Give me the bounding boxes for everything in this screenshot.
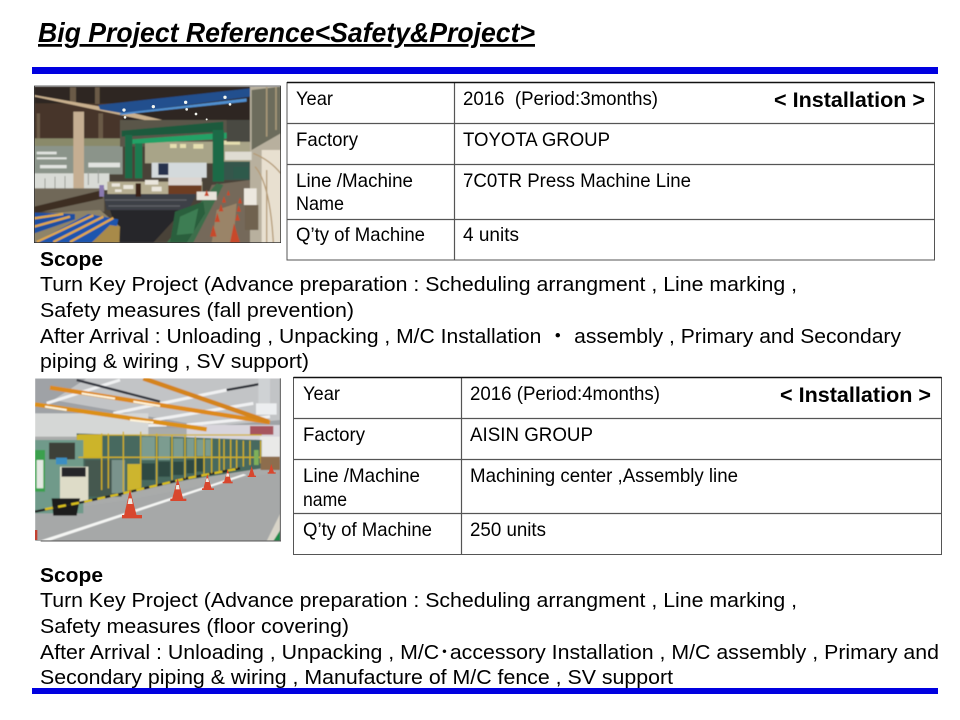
table: aisin project details: Year xyxy=(303,383,340,405)
table: toyota project details: 2016 (Period:3months) xyxy=(463,88,658,110)
table: aisin project details: name xyxy=(303,489,347,511)
scope text: aisin project: Turn Key Project (Advance preparation : Scheduling arrangment , Line marking , xyxy=(40,589,797,612)
scope text: aisin project: Safety measures (floor covering) xyxy=(40,615,349,638)
scope text: toyota project: piping & wiring , SV support) xyxy=(40,350,309,373)
table: toyota project details: Factory xyxy=(296,129,358,151)
table: toyota project details: Line /Machine xyxy=(296,170,413,192)
scope text: toyota project: Turn Key Project (Advance preparation : Scheduling arrangment , Line marking , xyxy=(40,273,797,296)
table: toyota project details: Year xyxy=(296,88,333,110)
table: aisin project details: 250 units xyxy=(470,519,546,541)
table: toyota project details: 7C0TR Press Machine Line xyxy=(463,170,691,192)
traffic cones xyxy=(122,464,276,518)
scope text: toyota project: After Arrival : Unloading , Unpacking , M/C Installation ・ assembly , Primary and Secondary xyxy=(40,325,902,348)
scope text: toyota project: Safety measures (fall prevention) xyxy=(40,299,354,322)
photo: press machine line installation xyxy=(34,86,281,243)
table: aisin project details: Machining center ,Assembly line xyxy=(470,465,738,487)
table: aisin project details: Line /Machine xyxy=(303,465,420,487)
photo: assembly line with safety cones xyxy=(35,378,281,542)
table: toyota project details: Q’ty of Machine xyxy=(296,224,425,246)
installation tag: aisin: < Installation > xyxy=(780,384,931,407)
table: aisin project details: AISIN GROUP xyxy=(470,424,593,446)
table: toyota project details: TOYOTA GROUP xyxy=(463,129,610,151)
table: toyota project details: Name xyxy=(296,193,344,215)
installation tag: toyota: < Installation > xyxy=(774,89,925,112)
scope text: aisin project: After Arrival : Unloading , Unpacking , M/C･accessory Installation , M/C assembly , Primary and xyxy=(40,641,939,664)
scope text: aisin project: Scope xyxy=(40,564,103,587)
scope text: aisin project xyxy=(40,564,939,689)
table: aisin project details: Factory xyxy=(303,424,365,446)
scope text: toyota project: Scope xyxy=(40,248,103,271)
table: aisin project details: Q’ty of Machine xyxy=(303,519,432,541)
title: Big Project Reference<Safety&Project> xyxy=(38,17,535,48)
table: toyota project details: 4 units xyxy=(463,224,519,246)
scope text: aisin project: Secondary piping & wiring , Manufacture of M/C fence , SV support xyxy=(40,666,673,689)
scope text: toyota project xyxy=(40,248,902,373)
top blue divider bar xyxy=(32,67,938,74)
table: aisin project details: 2016 (Period:4months) xyxy=(470,383,660,405)
table: toyota project details xyxy=(287,82,934,260)
table: aisin project details xyxy=(294,378,942,554)
bottom blue divider bar xyxy=(32,688,938,694)
